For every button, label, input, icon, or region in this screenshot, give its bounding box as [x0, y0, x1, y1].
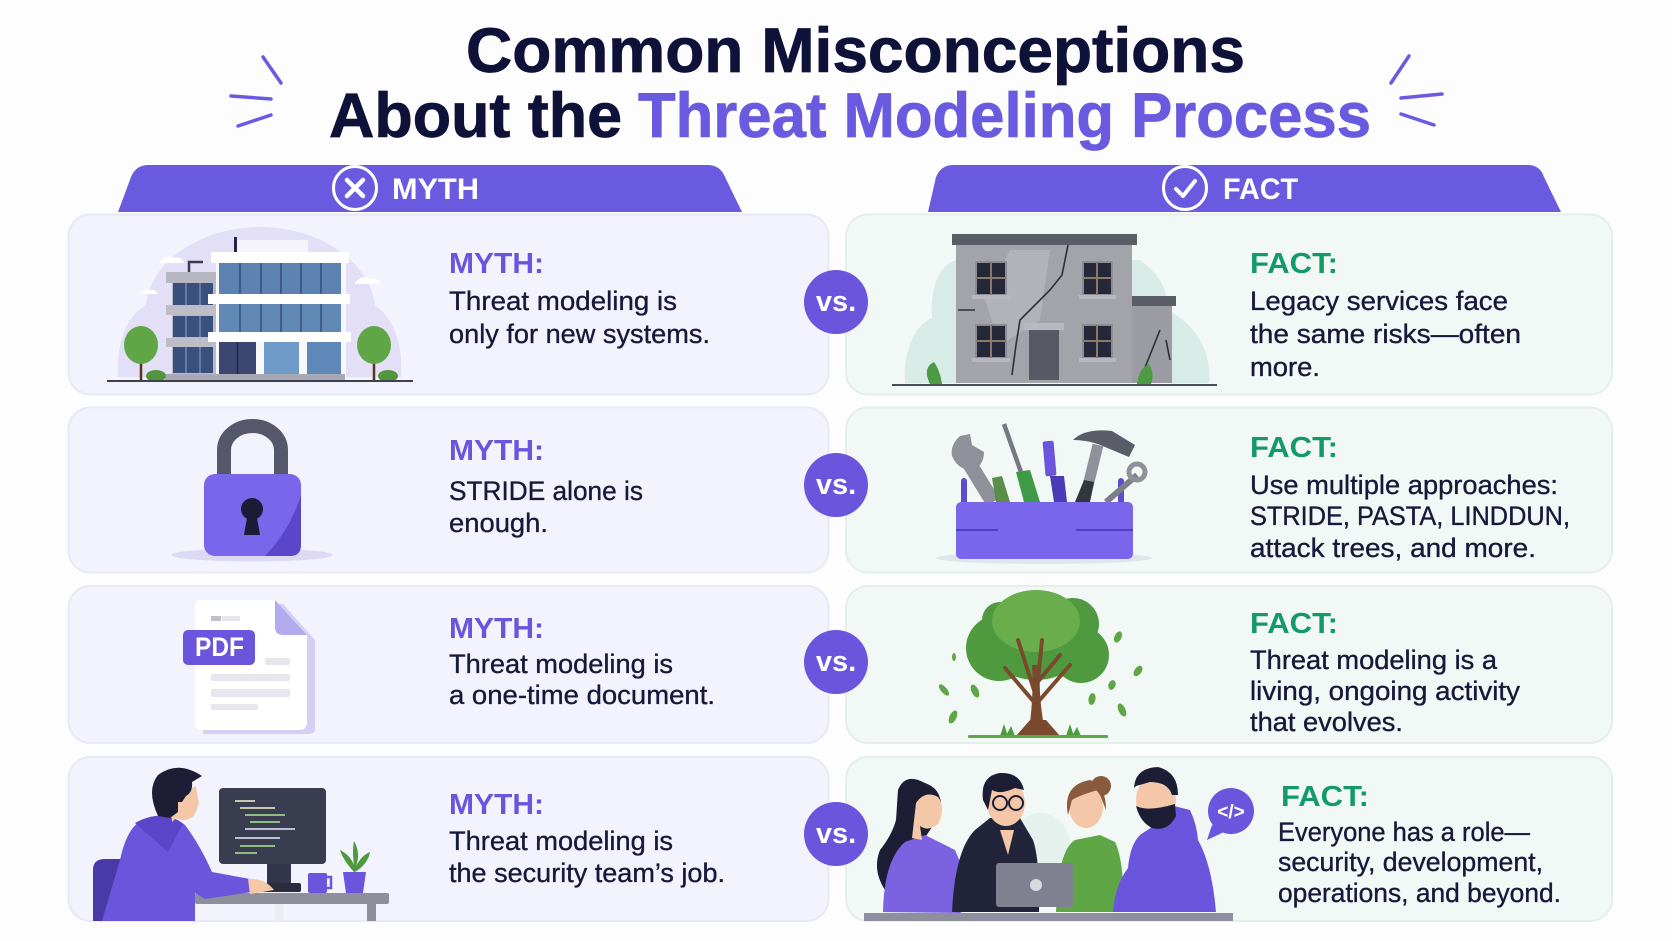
text: fact 1: more.: [1250, 352, 1320, 382]
badge: vs row 4: vs.: [816, 818, 856, 850]
text: myth 3: [449, 613, 715, 710]
text: fact 2: Use multiple approaches:: [1250, 470, 1558, 500]
text: myth 1: only for new systems.: [449, 319, 710, 349]
text: myth 1: MYTH:: [449, 248, 544, 280]
icon: purple padlock: [171, 426, 333, 562]
badge: vs row 1: [804, 270, 868, 334]
title: [329, 16, 1371, 151]
panel: fact living activity: [846, 586, 1612, 743]
text: myth 3: MYTH:: [449, 613, 544, 645]
icon: toolbox with tools: [936, 424, 1152, 564]
panel: myth new systems: [68, 214, 828, 394]
text: fact 1: Legacy services face: [1250, 286, 1508, 316]
text: myth 4: MYTH:: [449, 789, 544, 821]
badge: vs row 4: [804, 802, 868, 866]
badge: vs row 2: [804, 453, 868, 517]
woman in green: [1056, 776, 1124, 912]
panel: fact multiple approaches: [846, 408, 1612, 572]
text: myth 1: [449, 248, 710, 349]
bearded man: [1113, 767, 1216, 912]
icon: PDF document: [183, 600, 315, 734]
text: fact 3: that evolves.: [1250, 707, 1403, 737]
text: fact 3: living, ongoing activity: [1250, 676, 1521, 706]
text: myth 2: STRIDE alone is: [449, 476, 643, 506]
text: myth 4: the security team’s job.: [449, 858, 725, 888]
heading tab: FACT: [928, 165, 1561, 212]
text: fact 3: Threat modeling is a: [1250, 645, 1497, 675]
heading tab: FACT: FACT: [1223, 173, 1298, 206]
laptop: [996, 863, 1073, 907]
heading tab: MYTH: MYTH: [392, 173, 479, 206]
text: fact 4: security, development,: [1278, 847, 1543, 877]
panel: myth security team: [68, 757, 828, 921]
badge: vs row 1: vs.: [816, 286, 856, 318]
icon: growing tree: [937, 590, 1144, 738]
text: fact 2: [1250, 432, 1570, 563]
text: fact 3: FACT:: [1250, 608, 1338, 640]
icon: modern office building: [107, 227, 413, 382]
text: myth 4: Threat modeling is: [449, 826, 673, 856]
text: fact 2: attack trees, and more.: [1250, 533, 1536, 563]
panel: fact legacy services: [846, 214, 1612, 394]
icon: developer at computer: [93, 768, 389, 921]
text: fact 4: operations, and beyond.: [1278, 878, 1561, 908]
text: myth 2: enough.: [449, 508, 548, 538]
text: fact 2: STRIDE, PASTA, LINDDUN,: [1250, 501, 1570, 531]
text: myth 4: [449, 789, 725, 888]
icon: right sparkle lines: [1391, 56, 1442, 125]
text: myth 3: Threat modeling is: [449, 649, 673, 679]
text: myth 3: a one-time document.: [449, 680, 715, 710]
text: fact 2: FACT:: [1250, 432, 1338, 464]
panel: myth stride: [68, 408, 828, 572]
panel: fact everyone has a role: [846, 757, 1612, 921]
text: fact 3: [1250, 608, 1521, 737]
text: fact 4: Everyone has a role—: [1278, 817, 1530, 847]
text: myth 1: Threat modeling is: [449, 286, 677, 316]
text: fact 1: FACT:: [1250, 248, 1338, 280]
title: About the: [329, 81, 622, 151]
text: fact 4: [1278, 781, 1561, 908]
badge: vs row 2: vs.: [816, 469, 856, 501]
icon: PDF badge: PDF: [195, 632, 244, 662]
icon: code speech bubble: [1207, 788, 1254, 840]
icon: x in circle: [334, 166, 376, 210]
text: fact 1: the same risks—often: [1250, 319, 1521, 349]
badge: vs row 3: [804, 630, 868, 694]
text: fact 4: FACT:: [1281, 781, 1369, 813]
woman: [877, 779, 977, 913]
icon: cracked old house: [892, 234, 1217, 386]
badge: vs row 3: vs.: [816, 646, 856, 678]
icon: team around laptop: [864, 767, 1254, 921]
text: fact 1: [1250, 248, 1521, 382]
icon: check in circle: [1164, 166, 1206, 210]
text: myth 2: MYTH:: [449, 435, 544, 467]
man with glasses: [952, 773, 1039, 912]
icon: left sparkle lines: [231, 57, 281, 126]
text: myth 2: [449, 435, 643, 538]
icon: code speech bubble: </>: [1217, 802, 1245, 823]
panel: myth one-time document: [68, 586, 828, 743]
title: Common Misconceptions: [466, 16, 1245, 86]
heading tab: MYTH: [118, 165, 742, 212]
title: Threat Modeling Process: [638, 81, 1371, 151]
